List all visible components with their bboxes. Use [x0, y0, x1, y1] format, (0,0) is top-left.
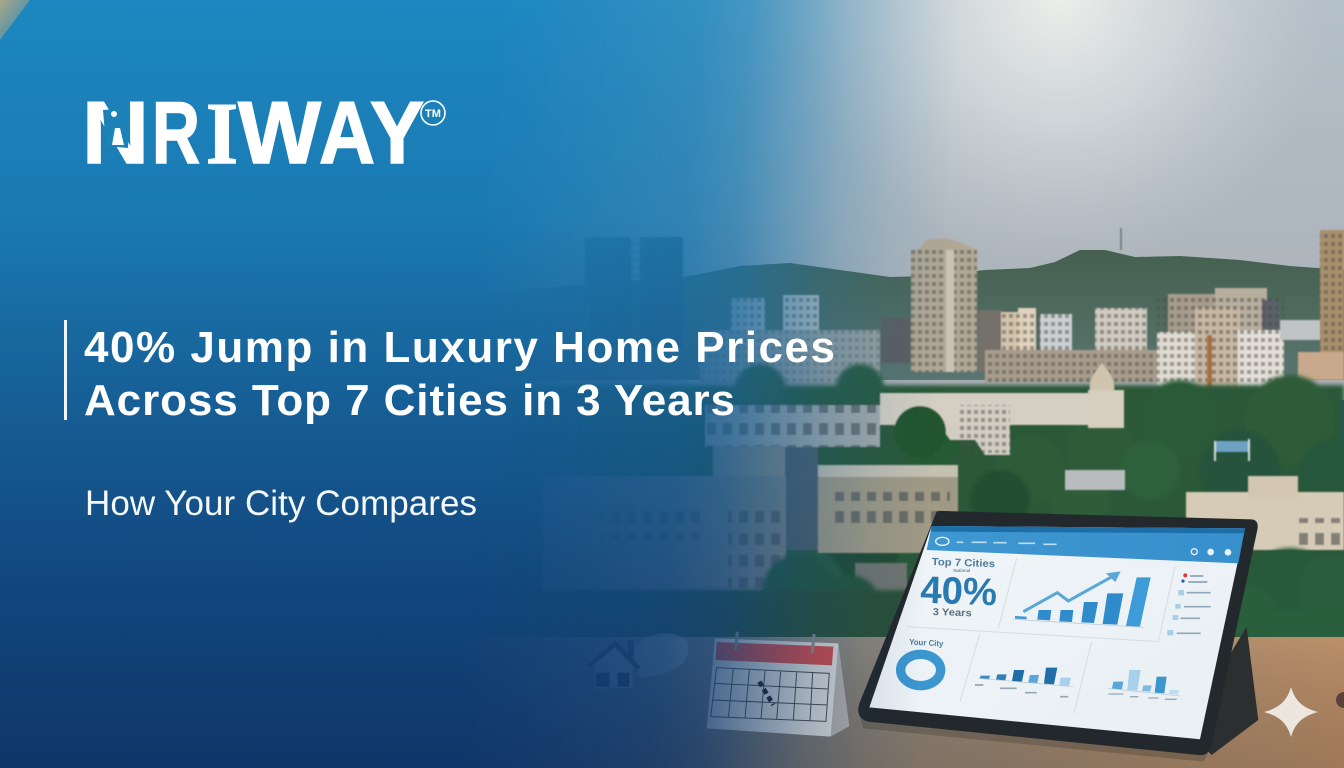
trademark badge: TM [425, 108, 441, 120]
tree in front [894, 406, 946, 458]
title accent bar [64, 320, 67, 420]
mid blocks [978, 308, 1147, 372]
mid-ground white buildings [543, 362, 1344, 623]
stat: 40 percent: National [953, 568, 970, 573]
title: 40% Jump in Luxury Home Prices [84, 323, 835, 372]
panel dividers [907, 558, 1175, 713]
top-left corner flare [0, 0, 30, 40]
logo: NRIWAY: N [82, 83, 149, 182]
sky background [0, 0, 1344, 400]
logo: NRIWAY: W [238, 83, 321, 182]
lower left building [543, 446, 958, 591]
icon: house model [587, 633, 688, 688]
title: Across Top 7 Cities in 3 Years [84, 376, 735, 425]
right lower building [1186, 476, 1344, 550]
dome [1088, 362, 1124, 428]
logo: NRIWAY: I [206, 86, 238, 183]
title [84, 323, 835, 425]
stat: 40 percent [909, 557, 998, 648]
far left tower [585, 237, 683, 347]
donut chart [901, 654, 941, 686]
main tower [911, 238, 977, 372]
chart: small bars [975, 668, 1073, 697]
icon: sparkle watermark [1264, 687, 1318, 737]
tree canopy [380, 364, 1344, 645]
tablet shadow [860, 717, 1208, 762]
mountains [400, 250, 1344, 380]
tablet [858, 511, 1258, 762]
tablet stand [1203, 627, 1258, 755]
right edge tower [1280, 230, 1344, 380]
stat: 40 percent: Top 7 Cities [932, 557, 995, 570]
icon: desk calendar [707, 632, 849, 737]
logo: NRIWAY [82, 83, 445, 183]
tablet body [858, 511, 1258, 755]
blue sign [1214, 439, 1250, 461]
stat: 40 percent: 3 Years [933, 607, 972, 619]
far left blocks [731, 295, 819, 343]
logo: NRIWAY: R [152, 83, 200, 182]
small dark object on table [1336, 692, 1344, 708]
logo figure [103, 108, 130, 148]
chart: rising bars with arrow [1013, 571, 1151, 627]
trademark badge [421, 101, 445, 125]
stat: 40 percent: Your City [909, 637, 944, 648]
dashboard header [927, 526, 1245, 563]
screen [869, 526, 1245, 739]
subtitle: How Your City Compares [85, 484, 477, 523]
table surface [0, 637, 1344, 768]
chart: right bars [1108, 670, 1180, 699]
long white building [705, 393, 1120, 455]
city skyline [530, 228, 1344, 390]
stat: 40 percent: 40% [920, 569, 998, 614]
logo: NRIWAY: A [319, 83, 375, 182]
legend list [1167, 573, 1211, 635]
logo: NRIWAY: Y [370, 83, 424, 182]
small rooftop structure [855, 563, 907, 623]
foreground trees [380, 548, 1344, 640]
right complex [1157, 288, 1284, 390]
blue gradient overlay [0, 0, 935, 768]
